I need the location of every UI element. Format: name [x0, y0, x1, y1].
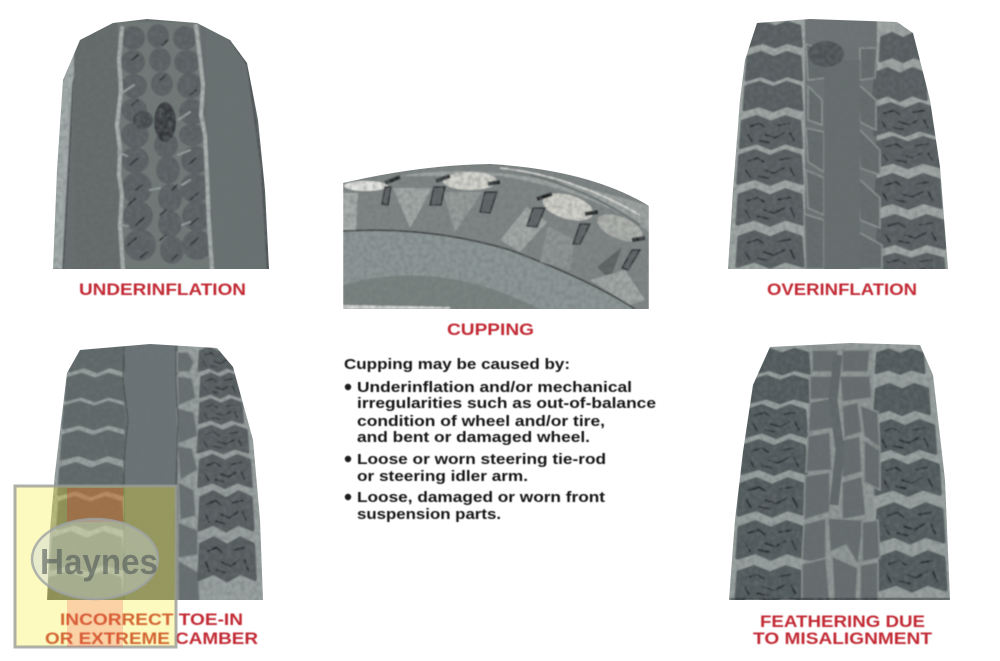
tire photo: overinflation [725, 15, 953, 281]
sidewall [343, 230, 635, 309]
text block: cupping causes [344, 356, 656, 523]
text block: cupping causes: Cupping may be caused by: [344, 356, 570, 373]
text block: cupping causes: and bent or damaged wheel. [357, 429, 590, 446]
label: feathering due to misalignment: TO MISALIGNMENT [753, 629, 933, 648]
label: overinflation: OVERINFLATION [767, 280, 917, 299]
tire photo: underinflation [50, 15, 275, 275]
label: incorrect toe-in or extreme camber [45, 610, 258, 648]
label: feathering due to misalignment: FEATHERING DUE [760, 612, 925, 631]
watermark: Haynes logo box: Haynes [40, 541, 158, 582]
label: feathering due to misalignment [753, 612, 933, 648]
label: cupping: CUPPING [447, 320, 534, 339]
tire photo: feathering [725, 340, 953, 603]
label: incorrect toe-in or extreme camber: OR EXTREME CAMBER [45, 629, 258, 648]
text block: cupping causes: condition of wheel and/or tire, [357, 413, 605, 430]
label: incorrect toe-in or extreme camber: INCORRECT TOE-IN [60, 610, 243, 629]
watermark: Haynes logo box [15, 486, 176, 647]
tire photo: incorrect toe-in [44, 340, 266, 610]
text block: cupping causes: Loose or worn steering tie-rod [357, 451, 606, 468]
text block: cupping causes: or steering idler arm. [357, 468, 528, 485]
text block: cupping causes: Loose, damaged or worn front [357, 489, 605, 506]
text block: cupping causes: irregularities such as out-of-balance [357, 395, 656, 412]
text block: cupping causes: Underinflation and/or mechanical [357, 379, 632, 396]
tire photo: cupping [343, 160, 649, 310]
text block: cupping causes: suspension parts. [357, 506, 501, 523]
label: underinflation: UNDERINFLATION [79, 280, 246, 299]
